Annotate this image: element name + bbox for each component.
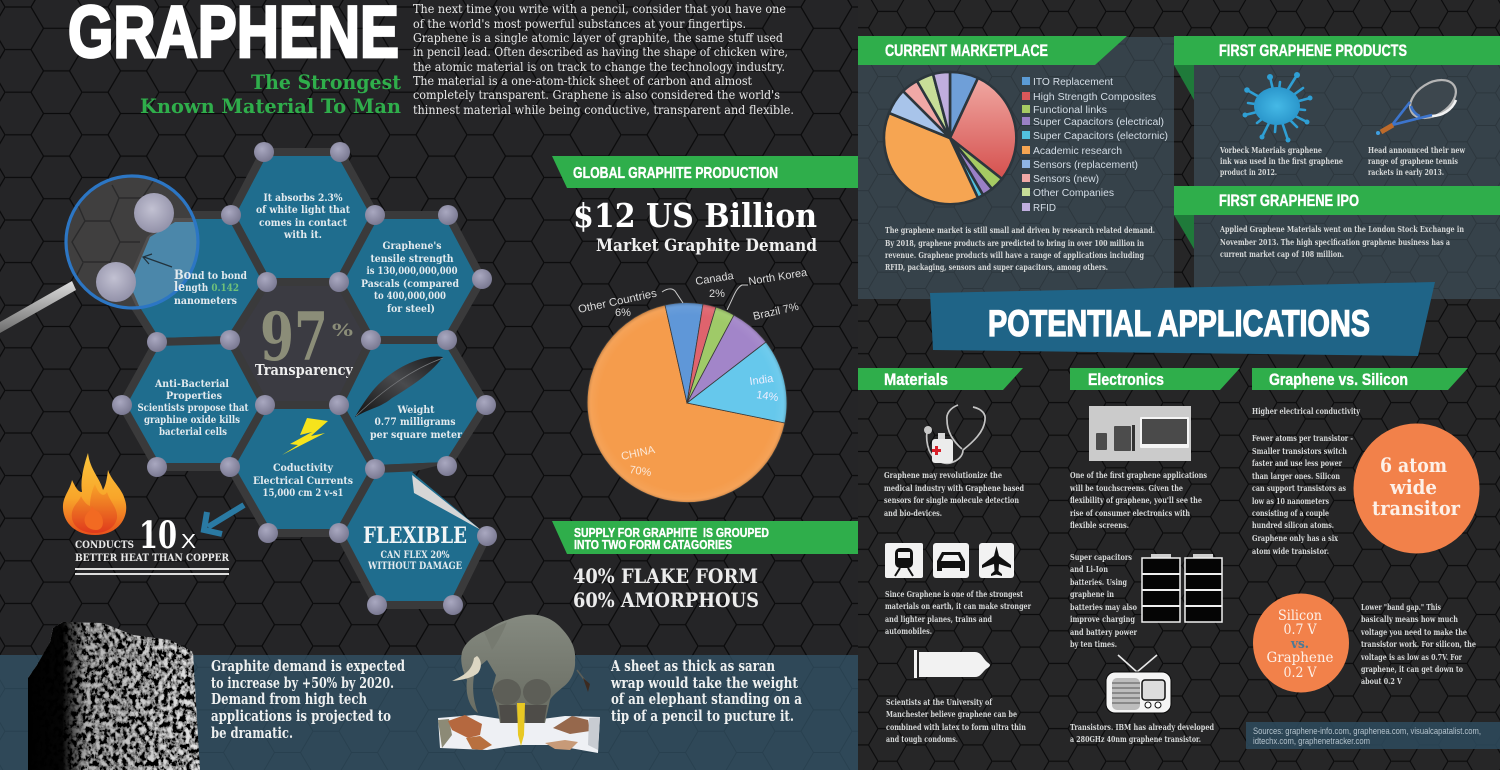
text: super capacitors: by ten times. [1070, 639, 1117, 649]
hexagon: absorbs light: of white light that [256, 204, 350, 216]
hexagon: flexible [339, 462, 492, 605]
text: super capacitors: batteries may also [1070, 602, 1138, 612]
text: fewer atoms: low as 10 nanometers [1252, 496, 1329, 506]
carbon atoms at the lattice vertices [112, 142, 497, 615]
page background: hexagon lattice [0, 0, 858, 770]
hexagon: conductivity [230, 405, 375, 533]
text: vehicles [885, 589, 1032, 636]
banner: electronics [1070, 368, 1240, 390]
icon: airplane [979, 543, 1014, 578]
banner: potential applications: POTENTIAL APPLICATIONS [988, 303, 1370, 344]
banner: first graphene products [1174, 36, 1500, 100]
callout: 6 atom wide transitor: 6 atom [1380, 453, 1447, 477]
text: marketplace description: The graphene market is still small and driven by research related demand. [885, 225, 1155, 235]
pie chart: graphite production by country [577, 267, 809, 503]
column: graphene vs. silicon [1246, 368, 1500, 749]
text: bond length: length 0.142 [174, 280, 239, 295]
text: saran wrap: A sheet as thick as saran [610, 658, 775, 675]
footer: sources [1246, 722, 1500, 749]
banner: first graphene products: FIRST GRAPHENE PRODUCTS [1219, 42, 1407, 60]
text: Head tennis rackets: rackets in early 2013. [1368, 167, 1444, 177]
text: fewer atoms: consisting of a couple [1252, 508, 1329, 518]
banner: first graphene IPO [1174, 186, 1500, 249]
text: super capacitors: Super capacitors [1070, 552, 1132, 562]
subtitle: The Strongest [251, 70, 402, 94]
text: fewer atoms [1252, 433, 1353, 556]
text: marketplace description: revenue. Graphene products will have a range of applications including [885, 250, 1144, 260]
hexagon: absorbs light: with it. [283, 229, 322, 241]
text: Vorbeck ink: Vorbeck Materials graphene [1219, 145, 1322, 155]
pie chart: graphite production by country: CHINA [620, 444, 657, 463]
text: fewer atoms: Fewer atoms per transistor - [1252, 433, 1353, 443]
legend: marketplace segments: ITO Replacement [1033, 77, 1113, 88]
legend: marketplace segments: High Strength Composites [1033, 92, 1156, 103]
text: Vorbeck ink: ink was used in the first graphene [1220, 156, 1343, 166]
hexagon: weight [339, 340, 486, 469]
panel: current marketplace [858, 36, 1174, 299]
heading: market value [573, 196, 817, 256]
intro text block: in pencil lead. Often described as having the shape of chicken wire, [413, 44, 788, 59]
paper sheet [438, 715, 600, 753]
hexagon: anti-bacterial: Scientists propose that [138, 402, 249, 414]
hexagon: tensile strength: to 400,000,000 [374, 290, 446, 302]
subtitle [140, 70, 402, 118]
text: graphite demand: Demand from high tech [211, 691, 367, 708]
intro text block: Graphene is a single atomic layer of graphite, the same stuff used [413, 30, 783, 45]
text: marketplace description: By 2018, graphene products are predicted to bring in over 100 million in [885, 238, 1144, 248]
text: Vorbeck ink: product in 2012. [1220, 167, 1277, 177]
intro text block: the atomic material is on track to change the technology industry. [413, 59, 785, 74]
hexagon: anti-bacterial [122, 340, 265, 467]
icon: elephant on a pencil [438, 615, 600, 753]
pie chart: graphite production by country: North Korea [748, 267, 809, 288]
text: transistors: a 280GHz 40nm graphene transistor. [1070, 734, 1201, 744]
hexagon: conductivity: Coductivity [273, 462, 334, 474]
icon: retro television [1106, 655, 1171, 713]
callout: silicon vs graphene voltage: 0.2 V [1284, 665, 1317, 681]
hands and sleeves [438, 715, 600, 750]
text: bond length: nanometers [174, 295, 237, 307]
pie chart: graphite production by country: Brazil 7% [752, 301, 800, 323]
honeycomb of graphene properties [112, 142, 497, 615]
intro text block: completely transparent. Graphene is also considered the world's [413, 87, 780, 102]
text: saran wrap: wrap would take the weight [610, 675, 798, 692]
hexagon: anti-bacterial: bacterial cells [159, 426, 227, 438]
text: form percentages [573, 564, 759, 612]
callout: conducts heat: 10 [139, 513, 177, 557]
callout: conducts heat: X [181, 531, 196, 553]
text: medical: sensors for single molecule detection [884, 495, 1019, 505]
hexagon: conductivity: Electrical Currents [253, 475, 353, 487]
text: fewer atoms: faster and use less power [1252, 458, 1343, 468]
text: graphite demand: to increase by +50% by 2020. [211, 675, 394, 692]
heading: market value: $12 US Billion [573, 196, 817, 235]
icon: ink splat [1242, 72, 1312, 142]
callout: 6 atom wide transitor: wide [1389, 475, 1437, 499]
hexagon: conductivity: 15,000 cm 2 v-s1 [262, 487, 344, 499]
intro text block: The next time you write with a pencil, consider that you have one [413, 1, 786, 16]
icon: train [885, 543, 923, 578]
hexagon: tensile strength: Graphene's [382, 240, 442, 252]
hexagon: tensile strength: Pascals (compared [361, 278, 460, 290]
icon: lightning bolt [282, 418, 328, 455]
hexagon: anti-bacterial: Properties [166, 390, 222, 402]
text: super capacitors: graphene in [1070, 589, 1114, 599]
pie chart: graphite production by country: Other Countries [577, 287, 658, 316]
hexagon: transparency: % [332, 321, 353, 341]
callout: silicon vs graphene voltage: vs. [1290, 637, 1309, 652]
banner: supply form categories: SUPPLY FOR GRAPHITE IS GROUPED [574, 526, 769, 540]
text: saran wrap [610, 658, 802, 725]
pie chart: graphite production by country: 14% [756, 389, 779, 404]
banner: materials: Materials [884, 370, 948, 389]
callout: 6 atom wide transitor: transitor [1372, 496, 1460, 520]
text: medical: and bio-devices. [884, 508, 942, 518]
text: medical: medical industry with Graphene based [884, 483, 1024, 493]
text: touchscreens: flexibility of graphene, you'll see the [1070, 495, 1202, 505]
callout: 6 atom wide transitor [1354, 424, 1480, 554]
text: touchscreens: rise of consumer electronics with [1070, 508, 1190, 518]
text: graphite demand: applications is projected to [211, 708, 391, 725]
text: band gap: voltage is as low as 0.7V. For [1360, 652, 1463, 662]
text: medical [884, 470, 1024, 518]
text: band gap [1360, 602, 1476, 686]
pie chart: marketplace segments [884, 72, 1016, 204]
text: bond length [174, 268, 248, 307]
text: condoms: and tough condoms. [886, 734, 958, 744]
legend: marketplace segments: Super Capacitors (electornic) [1033, 131, 1168, 142]
hexagon: flexible: CAN FLEX 20% [380, 549, 450, 561]
banner: materials [858, 368, 1023, 390]
hexagon: flexible: FLEXIBLE [363, 523, 467, 549]
legend: marketplace segments: Sensors (new) [1033, 174, 1099, 185]
text: touchscreens [1069, 470, 1207, 530]
text: IPO description [1219, 224, 1464, 259]
banner: global graphite production [552, 156, 858, 188]
elephant [452, 615, 590, 723]
text: transistors [1070, 722, 1214, 744]
intro text block: The material is a one-atom-thick sheet of carbon and almost [413, 73, 752, 88]
text: Head tennis rackets: Head announced their new [1368, 145, 1466, 155]
text: Head tennis rackets [1368, 145, 1466, 177]
text: band gap: transistor work. For silicon, the [1361, 639, 1476, 649]
text: graphite demand: Graphite demand is expected [211, 658, 405, 675]
hexagon: bond length [118, 215, 267, 342]
icon: feather [355, 357, 443, 417]
text: super capacitors: improve charging [1070, 614, 1135, 624]
legend: marketplace segments: Sensors (replacement) [1033, 160, 1138, 171]
banner: current marketplace [858, 36, 1127, 65]
text: higher conductivity: Higher electrical conductivity [1252, 406, 1360, 416]
callout: conducts heat: BETTER HEAT THAN COPPER [75, 552, 229, 564]
text: vehicles: automobiles. [885, 626, 932, 636]
text: fewer atoms: hundred silicon atoms. [1252, 520, 1334, 530]
hexagon: transparency: 97 [260, 298, 328, 376]
legend: marketplace segments: Functional links [1033, 105, 1107, 116]
intro text block [413, 1, 794, 117]
legend: marketplace segments: Other Companies [1033, 188, 1114, 199]
text: form percentages: 60% AMORPHOUS [573, 588, 759, 612]
text: condoms: Manchester believe graphene can be [886, 709, 1017, 719]
pie chart: graphite production by country: 70% [629, 464, 652, 479]
text: touchscreens: One of the first graphene applications [1070, 470, 1207, 480]
text: marketplace description [885, 225, 1155, 272]
text: fewer atoms: than larger ones. Silicon [1252, 471, 1340, 481]
panel: first graphene products and IPO [1174, 36, 1500, 299]
hexagon: transparency: Transparency [255, 361, 354, 379]
text: band gap: graphene, it can get down to [1361, 664, 1464, 674]
callout: silicon vs graphene voltage: Silicon [1278, 608, 1322, 624]
banner: first graphene IPO: FIRST GRAPHENE IPO [1219, 192, 1359, 210]
legend: marketplace segments: Academic research [1033, 146, 1122, 157]
banner: potential applications [930, 282, 1435, 356]
hexagon: tensile strength: is 130,000,000,000 [366, 265, 458, 277]
text: vehicles: Since Graphene is one of the strongest [885, 589, 1023, 599]
icon: stethoscope and bottle [924, 405, 985, 463]
column: materials [858, 368, 1032, 744]
pie chart: graphite production by country: Canada [695, 270, 735, 288]
subtitle: Known Material To Man [140, 94, 401, 118]
text: bond length: Bond to bond [174, 268, 248, 283]
icon: touchscreen devices [1089, 406, 1191, 461]
icon: magnifying glass over bond length [0, 170, 210, 333]
text: vehicles: materials on earth, it can make stronger [885, 601, 1032, 611]
text: fewer atoms: can support transistors as [1252, 483, 1346, 493]
hexagon: flexible: WITHOUT DAMAGE [367, 560, 462, 572]
text: saran wrap: of an elephant standing on a [611, 691, 802, 708]
text: band gap: about 0.2 V [1361, 676, 1403, 686]
panel: bottom band [0, 615, 858, 770]
text: saran wrap: tip of a pencil to pucture it. [611, 708, 794, 725]
column: electronics [1069, 368, 1240, 744]
text: fewer atoms: atom wide transistor. [1252, 546, 1329, 556]
hexagon: tensile strength: tensile strength [370, 253, 454, 265]
pie chart: graphite production by country: 2% [709, 288, 725, 300]
text: band gap: Lower "band gap." This [1361, 602, 1441, 612]
text: Vorbeck ink [1219, 145, 1343, 177]
banner: supply form categories [552, 521, 858, 554]
heading: market value: Market Graphite Demand [596, 236, 817, 256]
hexagon: absorbs light [231, 152, 375, 282]
text: marketplace description: RFID, packaging, sensors and super capacitors, among others. [885, 262, 1108, 272]
hexagon: absorbs light: It absorbs 2.3% [264, 192, 343, 204]
callout: silicon vs graphene voltage: Graphene [1266, 650, 1334, 666]
text: super capacitors: and battery power [1070, 627, 1138, 637]
text: fewer atoms: Smaller transistors switch [1252, 446, 1347, 456]
callout: conducts heat [75, 513, 229, 575]
callout: silicon vs graphene voltage [1253, 594, 1349, 692]
icon: page curl [412, 475, 481, 530]
banner: supply form categories: INTO TWO FORM CATAGORIES [574, 538, 732, 552]
footer: sources: idtechx.com, graphenetracker.com [1253, 736, 1370, 747]
legend: marketplace segments: Super Capacitors (electrical) [1033, 117, 1164, 128]
text: medical: Graphene may revolutionize the [884, 470, 1002, 480]
banner: current marketplace: CURRENT MARKETPLACE [885, 42, 1048, 60]
hexagon: anti-bacterial: Anti-Bacterial [154, 378, 229, 390]
icon: graphite rock [28, 622, 200, 770]
arrow: conductivity to heat [204, 505, 244, 534]
text: super capacitors [1070, 552, 1138, 649]
text: transistors: Transistors. IBM has already developed [1070, 722, 1214, 732]
text: super capacitors: batteries. Using [1070, 577, 1127, 587]
pie chart: graphite production by country: India [749, 373, 775, 388]
icon: tennis racket [1376, 72, 1463, 135]
text: band gap: basically means how much [1361, 614, 1458, 624]
intro text block: thinnest material while being conductive, transparent and flexible. [413, 102, 794, 117]
banner: electronics: Electronics [1088, 370, 1164, 389]
icon: condom [914, 650, 990, 678]
pencil [517, 703, 525, 746]
icon: car [933, 543, 969, 578]
banner: graphene vs. silicon [1252, 368, 1468, 390]
callout: conducts heat: CONDUCTS [75, 539, 134, 551]
text: touchscreens: will be touchscreens. Given the [1069, 483, 1183, 493]
hexagon: tensile strength [339, 215, 482, 340]
hexagon: transparency [230, 282, 371, 405]
text: form percentages: 40% FLAKE FORM [573, 564, 758, 588]
text: touchscreens: flexible screens. [1070, 520, 1129, 530]
text: fewer atoms: Graphene only has a six [1252, 533, 1338, 543]
hexagon: weight: per square meter [370, 429, 462, 441]
pie chart: graphite production by country: 6% [615, 307, 631, 319]
hexagon: anti-bacterial: graphine oxide kills [144, 414, 240, 426]
text: graphite demand: be dramatic. [211, 725, 293, 742]
text: band gap: voltage you need to make the [1360, 627, 1467, 637]
text: Head tennis rackets: range of graphene tennis [1368, 156, 1458, 166]
banner: graphene vs. silicon: Graphene vs. Silicon [1269, 370, 1408, 389]
text: vehicles: and lighter planes, trains and [885, 614, 992, 624]
text: condoms [886, 697, 1026, 744]
icon: batteries [1142, 554, 1222, 622]
legend: marketplace segments [1022, 77, 1168, 214]
text: condoms: combined with latex to form ultra thin [886, 722, 1026, 732]
text: graphite demand [211, 658, 405, 742]
icon: flame [63, 453, 126, 535]
intro text block: of the world's most powerful substances at your fingertips. [413, 16, 746, 31]
right page background: hexagon lattice [858, 0, 1500, 770]
legend: marketplace segments: RFID [1033, 203, 1056, 214]
hexagon: tensile strength: for steel) [387, 303, 435, 315]
text: IPO description: current market cap of 108 million. [1220, 249, 1344, 259]
banner: global graphite production: GLOBAL GRAPHITE PRODUCTION [573, 165, 778, 182]
hexagon: weight: 0.77 milligrams [374, 416, 456, 428]
callout: silicon vs graphene voltage: 0.7 V [1284, 622, 1317, 638]
hexagon: weight: Weight [397, 404, 435, 416]
text: condoms: Scientists at the University of [886, 697, 992, 707]
hexagon: absorbs light: comes in contact [259, 217, 347, 229]
text: super capacitors: and Li-Ion [1070, 564, 1108, 574]
